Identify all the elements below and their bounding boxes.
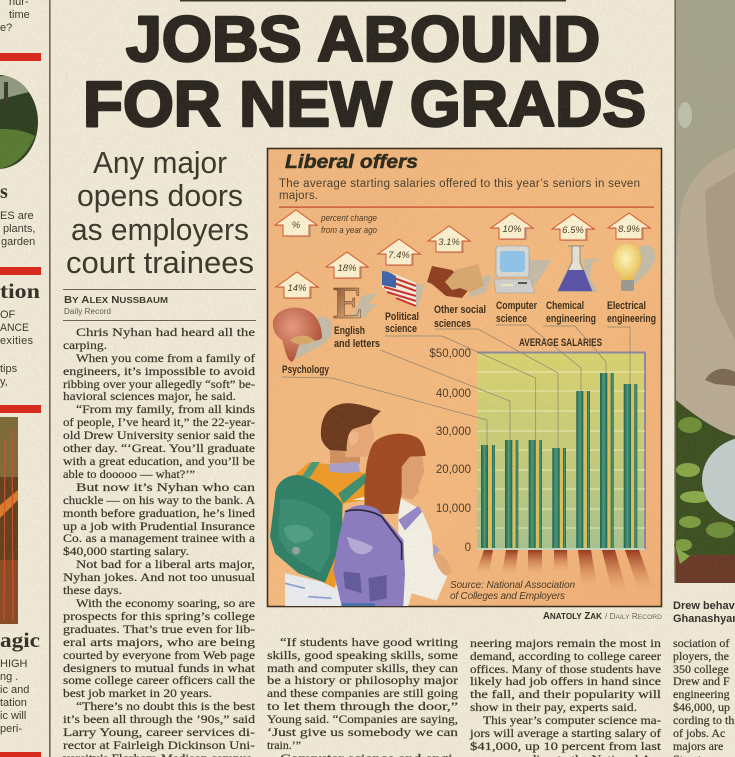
article column 1: Co. as a management trainee with a <box>63 531 256 545</box>
icon: computer <box>494 246 552 293</box>
teaser: garden <box>0 181 35 248</box>
article column 3: demand, according to college career <box>470 649 661 663</box>
major labels: Electrical <box>607 300 646 312</box>
arrow: psychology 14%: 14% <box>287 283 307 294</box>
article column 1: graduates. That’s true even for lib- <box>63 622 255 636</box>
article column 1: engineers, it’s impossible to avoid <box>63 364 255 378</box>
article column 1: ribbing over your allegedly “soft” be- <box>63 377 255 391</box>
girl's purple backpack <box>333 505 422 606</box>
teaser: magic: agic <box>0 628 40 652</box>
shadow arrows: percent changes <box>278 214 652 299</box>
article column 3: This year’s computer science ma- <box>483 713 661 727</box>
teaser: magic: ic and <box>0 684 29 696</box>
teaser: garden: garden <box>1 236 35 248</box>
headline: FOR NEW GRADS <box>83 68 646 140</box>
article column 3: the fall, and their popularity will <box>470 687 662 701</box>
teaser: magic: HIGH <box>0 658 28 670</box>
article column 3: $41,000, up 10 percent from last <box>470 739 662 753</box>
article column 4 <box>673 636 734 757</box>
article column 1 <box>63 325 256 757</box>
article column 1: best job market in 20 years. <box>63 686 212 700</box>
article column 1: chuckle — on his way to the bank. A <box>63 493 255 507</box>
harp photo strip <box>0 417 18 624</box>
article column 4: majors are <box>673 739 723 753</box>
boy's green backpack <box>270 462 365 583</box>
article column 2: Young said. “Companies are saying, <box>267 712 458 726</box>
article column 1: some college career officers call the <box>63 673 255 687</box>
subheading: as employers <box>71 213 249 247</box>
teaser text: top <box>0 0 30 34</box>
article column 1: other day. “‘Great. You’ll graduate <box>63 441 255 455</box>
teaser: garden: plants, <box>3 223 35 235</box>
article column 1: Chris Nyhan had heard all the <box>76 325 255 339</box>
teaser: magic: peri- <box>0 723 22 735</box>
arrow: English 18% <box>326 252 368 278</box>
teaser: tion: tips <box>0 363 18 375</box>
article column 2: math and computer skills, they can <box>267 661 458 675</box>
article column 1: able to dooooo — what?’” <box>63 467 195 481</box>
chart y axis labels: 0 <box>465 542 471 554</box>
bars <box>481 373 637 548</box>
headline <box>83 3 646 140</box>
byline: Daily Record <box>64 307 111 316</box>
teaser text: top: e? <box>0 22 12 34</box>
article column 1: havioral sciences major, he said. <box>63 389 236 403</box>
article column 1: “From my family, from all kinds <box>76 402 255 416</box>
chart heading: AVERAGE SALARIES <box>519 337 602 349</box>
icon: chemical flask <box>558 246 602 292</box>
article column 1: When you come from a family of <box>76 351 255 365</box>
article column 1: it’s been all through the ’90s,” said <box>63 712 255 726</box>
photo caption <box>673 600 735 625</box>
arrow: electrical engineering 8.9%: 8.9% <box>618 224 640 235</box>
source note <box>450 580 575 602</box>
major labels: science <box>496 313 527 325</box>
article column 1: with a great education, and you’ll be <box>63 454 255 468</box>
red divider bars <box>0 53 41 757</box>
article column 4: sociation of <box>673 636 729 650</box>
headline: JOBS ABOUND <box>126 3 600 75</box>
article column 3: jors will average a starting salary of <box>469 726 661 740</box>
major labels: Political <box>385 311 419 323</box>
arrow: electrical engineering 8.9% <box>608 213 650 239</box>
article column 1: Larry Young, career services di- <box>63 725 255 739</box>
article column 3: offices. Many of those students have <box>470 662 661 676</box>
article column 1: carping. <box>63 338 107 352</box>
article column 1: $40,000 starting salary. <box>63 544 189 558</box>
bar shadows <box>476 550 653 592</box>
arrow: other social sciences 3.1%: 3.1% <box>438 237 460 248</box>
article column 1: Nyhan jokes. And not too unusual <box>63 570 256 584</box>
illustration credit: ANATOLY ZAK <box>543 611 603 622</box>
chart plot area <box>477 352 645 549</box>
article column 1: rector at Fairleigh Dickinson Uni- <box>63 738 255 752</box>
article column 1: eral arts majors, who are being <box>63 635 255 649</box>
panel background <box>268 148 662 606</box>
icon: handshake <box>427 264 492 298</box>
subheading: court trainees <box>66 246 254 280</box>
article column 1: of people, I’ve heard it,” the 22-year- <box>63 415 255 429</box>
subheading <box>66 146 254 280</box>
article column 3: likely had job offers in hand since <box>470 674 661 688</box>
arrow: computer science 10%: 10% <box>502 224 522 235</box>
article column 4: cording to th <box>673 713 734 727</box>
teaser: garden: s <box>0 181 8 203</box>
illustration credit: / DAILY RECORD <box>605 612 662 621</box>
major labels: sciences <box>434 318 471 330</box>
icon: letter E: E <box>333 277 363 328</box>
chart y axis labels: 30,000 <box>436 426 471 438</box>
article column 3 <box>469 636 662 757</box>
article column 2: and these companies are still going <box>267 686 458 700</box>
teaser: tion: exities <box>0 335 34 347</box>
article column 1: old Drew University senior said the <box>63 428 255 442</box>
article column 1: month before graduation, he’s lined <box>63 506 255 520</box>
arrow: computer science 10% <box>491 213 533 239</box>
teaser: magic <box>0 628 40 735</box>
chart y axis labels: $50,000 <box>429 348 471 360</box>
article column 4: Drew and F <box>673 674 730 688</box>
article column 1: courted by everyone from Web page <box>63 648 255 662</box>
illustration credit <box>543 611 662 622</box>
chart y axis labels: 40,000 <box>436 388 471 400</box>
major labels: engineering <box>607 313 656 325</box>
arrow: other social sciences 3.1% <box>428 226 470 252</box>
subheading: opens doors <box>77 179 243 213</box>
panel description <box>279 178 640 202</box>
arrow: political science 7.4%: 7.4% <box>388 250 410 261</box>
article column 4: $46,000, up <box>673 700 730 714</box>
panel title: Liberal offers <box>285 152 418 173</box>
article column 4: of jobs. Ac <box>673 726 725 740</box>
student: boy <box>285 403 381 606</box>
major labels: Computer <box>496 300 538 312</box>
chart y axis labels: 10,000 <box>436 503 471 515</box>
icon: American flag <box>382 271 424 308</box>
major labels: Chemical <box>546 300 584 312</box>
teaser: garden: ES are <box>0 210 34 222</box>
article column 1: designers to mutual funds in what <box>63 661 256 675</box>
student: girl <box>352 434 452 606</box>
teaser: tion: ANCE <box>0 322 29 334</box>
illustration: students with backpacks <box>270 403 452 606</box>
article column 2: to let them through the door,” <box>267 699 458 713</box>
article column 3: show in their pay, experts said. <box>470 700 637 714</box>
article column 2: train.’” <box>267 738 301 752</box>
article column 2: be a history or philosophy major <box>267 673 458 687</box>
arrow: political science 7.4% <box>378 239 420 265</box>
article column 4: engineering <box>673 687 730 701</box>
article column 2 <box>267 635 458 757</box>
teaser: magic: ic will <box>0 710 26 722</box>
panel description: The average starting salaries offered to this year’s seniors in seven <box>279 178 640 190</box>
major labels: Psychology <box>282 364 330 376</box>
article column 3: neering majors remain the most in <box>470 636 661 650</box>
major labels: and letters <box>334 338 380 350</box>
source note: Source: National Association <box>450 580 575 591</box>
major labels: English <box>334 325 365 337</box>
article column 2: skills, good speaking skills, some <box>267 648 458 662</box>
bar chart: average salaries <box>282 325 653 592</box>
icon: brain <box>273 308 332 362</box>
article column 1: But now it’s Nyhan who can <box>76 480 255 494</box>
article column 1: With the economy soaring, so are <box>76 596 255 610</box>
leader lines from labels to bars <box>282 325 630 448</box>
byline: BY ALEX NUSSBAUM <box>64 295 168 306</box>
icon: light bulb <box>613 244 655 291</box>
major labels: Other social <box>434 304 486 316</box>
article column 1: prospects for this spring’s college <box>63 609 255 623</box>
teaser: tion: y, <box>0 376 8 388</box>
teaser: tion <box>0 279 40 388</box>
subheading: Any major <box>93 146 227 180</box>
article column 2: ‘Just give us somebody we can <box>267 725 458 739</box>
byline <box>63 289 256 321</box>
left neighbouring column <box>0 0 41 757</box>
article column 4: ployers, the <box>673 649 729 663</box>
oval garden photo <box>0 75 38 169</box>
chart y axis labels: 20,000 <box>436 464 471 476</box>
arrow: chemical engineering 6.5% <box>552 214 594 240</box>
source note: of Colleges and Employers <box>450 591 565 602</box>
article column 4: 350 college <box>673 662 729 676</box>
article column 1: “There’s no doubt this is the best <box>76 699 256 713</box>
panel description: majors. <box>279 190 318 202</box>
legend: percent change arrow: percent change <box>320 213 377 224</box>
article column 1: up a job with Prudential Insurance <box>63 519 255 533</box>
teaser: magic: ng . <box>0 671 18 683</box>
teaser text: top: time <box>9 9 30 21</box>
panel: Liberal offers infographic <box>268 148 662 606</box>
article column 1: these days. <box>63 583 122 597</box>
arrow: chemical engineering 6.5%: 6.5% <box>562 225 584 236</box>
major labels: science <box>385 323 417 335</box>
arrow: English 18%: 18% <box>337 263 357 274</box>
arrow: psychology 14% <box>276 272 318 298</box>
legend: percent change arrow: from a year ago <box>321 225 377 236</box>
icon: letter E <box>333 277 378 328</box>
legend: percent change arrow: % <box>292 220 301 231</box>
article column 1: Not bad for a liberal arts major, <box>76 557 255 571</box>
teaser: tion: tion <box>0 279 40 303</box>
major labels: engineering <box>546 313 596 325</box>
photo: student sitting in garden <box>674 0 735 583</box>
legend: percent change arrow <box>275 210 377 237</box>
chart y axis labels <box>429 348 471 554</box>
major labels <box>282 300 656 376</box>
article column 2: “If students have good writing <box>280 635 458 649</box>
teaser: tion: OF <box>0 309 16 321</box>
teaser: magic: tation <box>0 697 27 709</box>
